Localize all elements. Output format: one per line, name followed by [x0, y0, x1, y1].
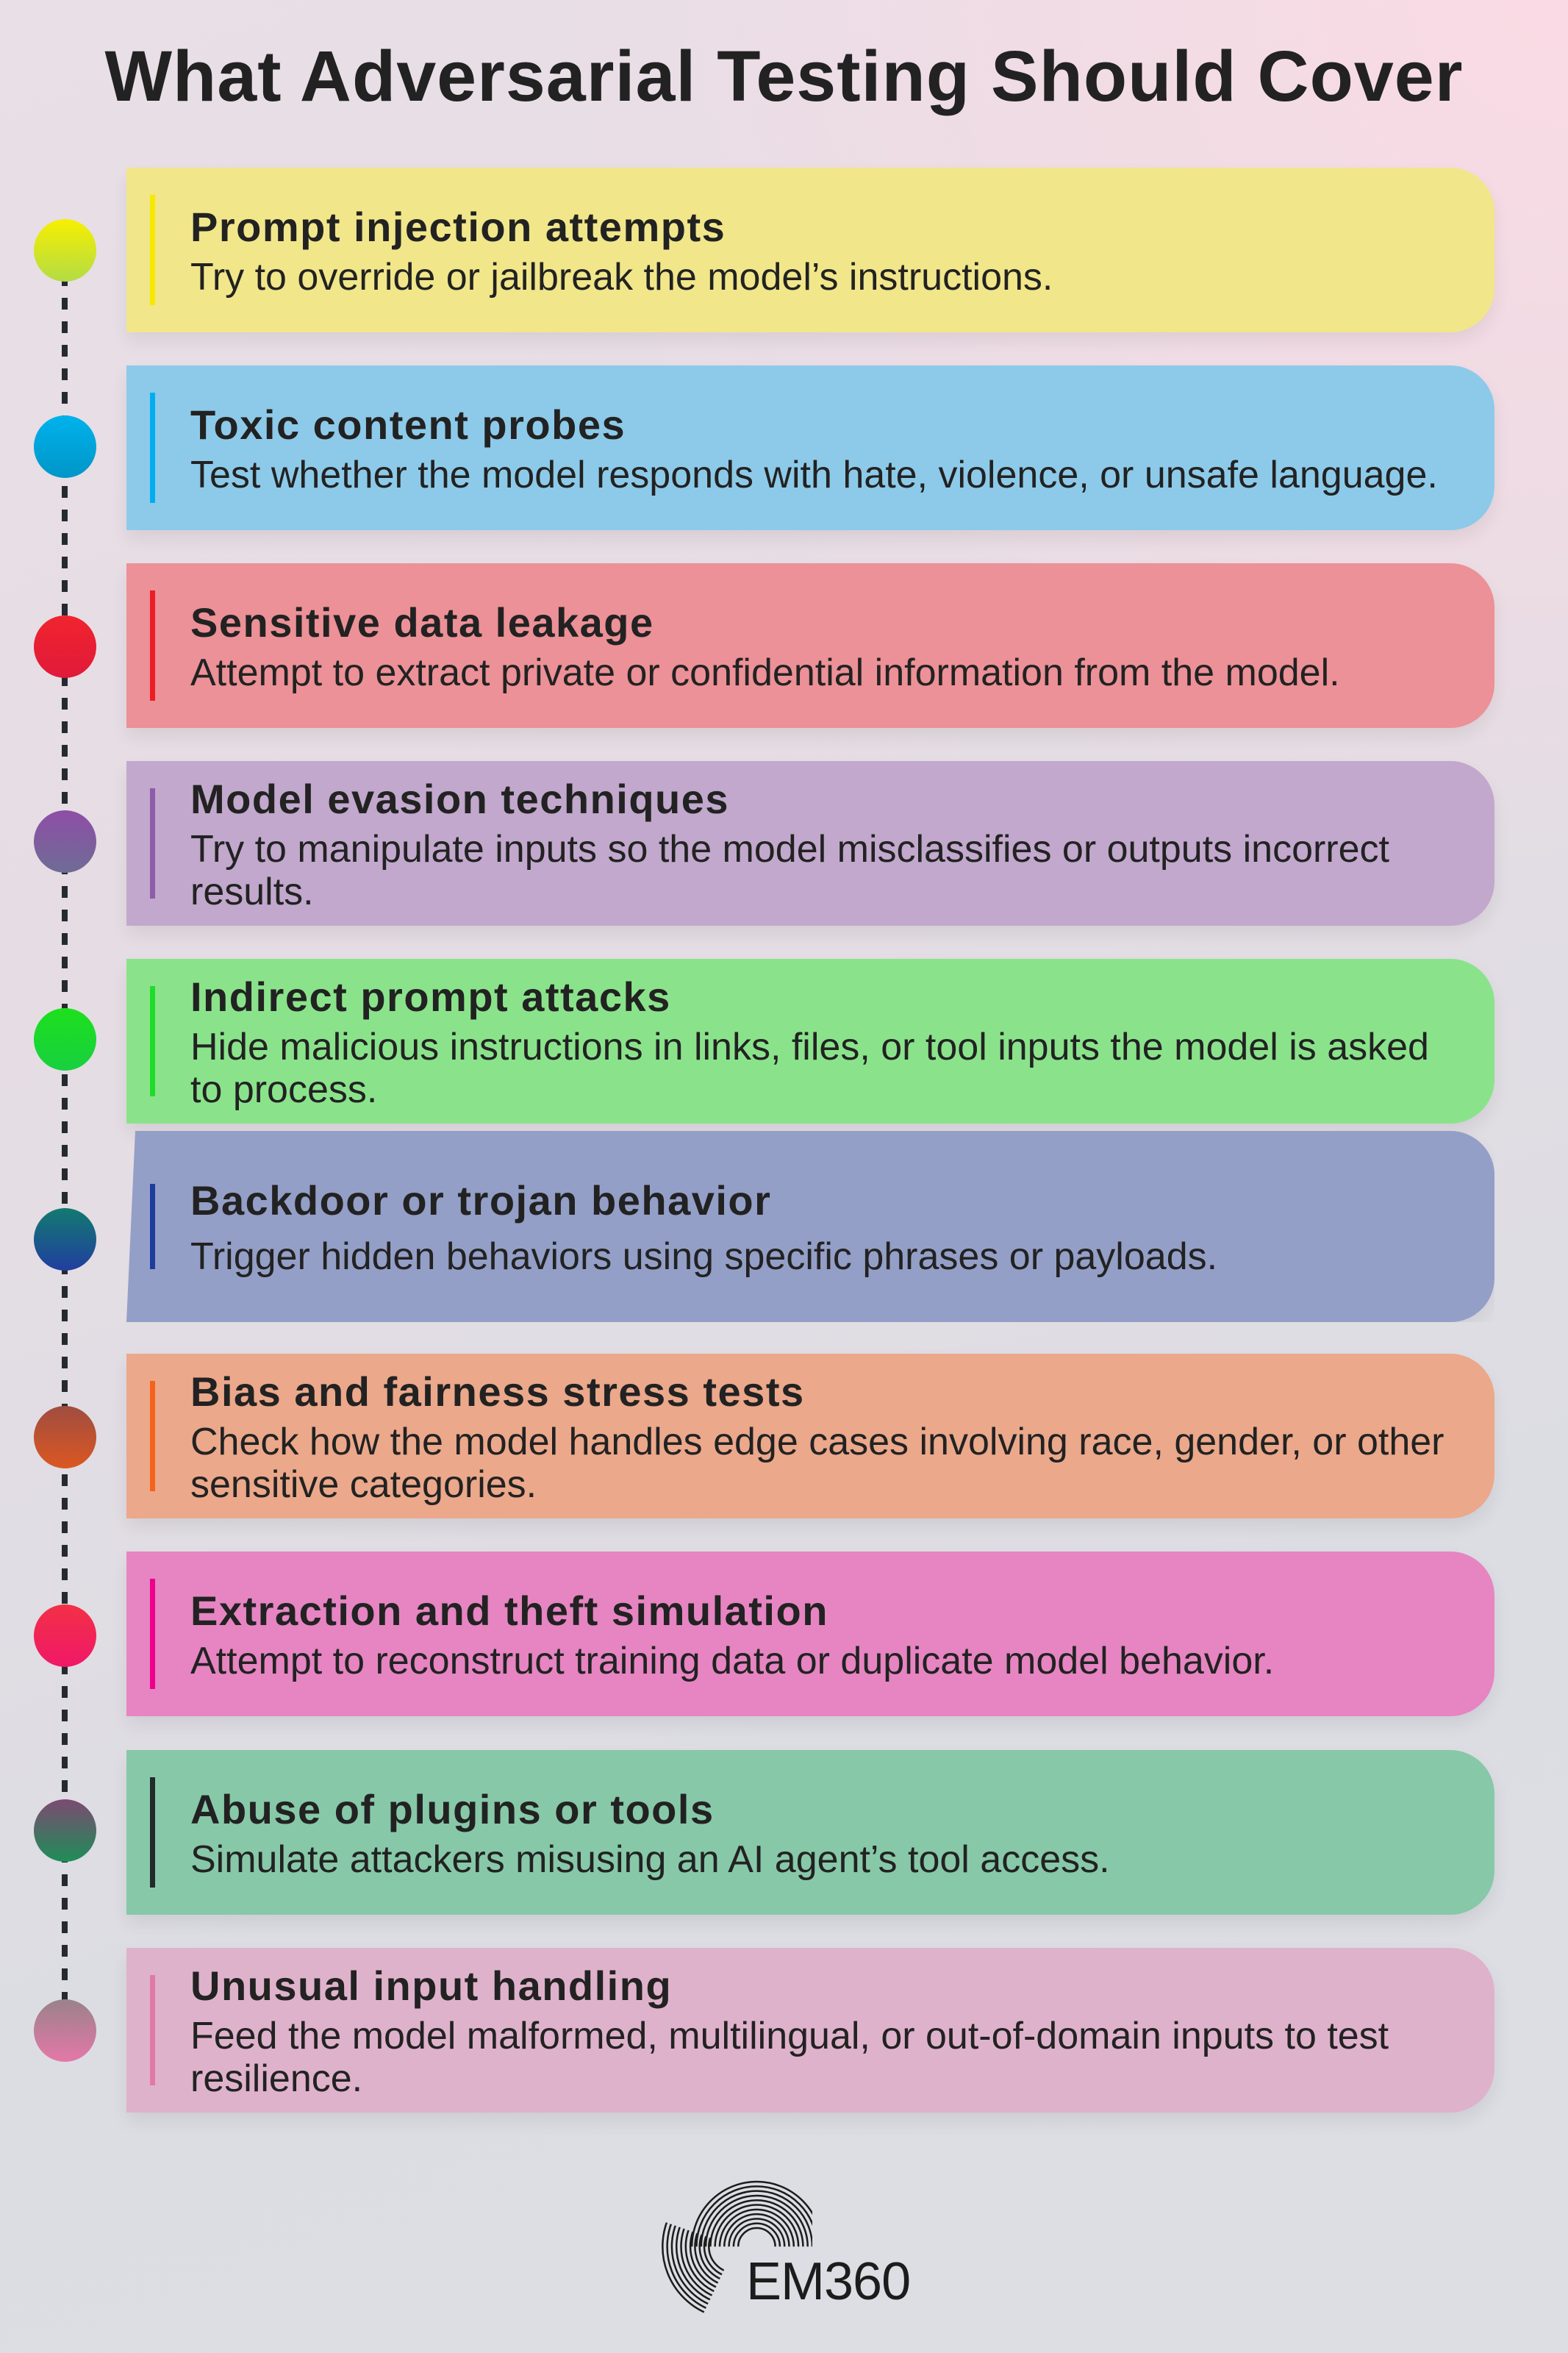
- heading: Toxic content probes: [190, 401, 626, 448]
- description: Try to manipulate inputs so the model misclassifies or outputs incorrect: [190, 828, 1389, 871]
- description: Trigger hidden behaviors using specific phrases or payloads.: [190, 1235, 1217, 1278]
- description: results.: [190, 871, 314, 913]
- description: [190, 828, 1389, 913]
- description: to process.: [190, 1068, 377, 1111]
- dot 5: [34, 1008, 96, 1071]
- panel: toxic content: [126, 365, 1494, 530]
- panel: extraction: [126, 1552, 1494, 1716]
- title: What Adversarial Testing Should Cover: [104, 36, 1463, 116]
- logo: EM360: [662, 2181, 910, 2313]
- description: Hide malicious instructions in links, files, or tool inputs the model is asked: [190, 1026, 1429, 1068]
- description: sensitive categories.: [190, 1463, 537, 1506]
- heading: Prompt injection attempts: [190, 204, 726, 250]
- panel: plugins: [126, 1750, 1494, 1915]
- heading: Backdoor or trojan behavior: [190, 1177, 771, 1224]
- dot 8: [34, 1604, 96, 1667]
- panel: prompt injection: [126, 168, 1494, 332]
- heading: Abuse of plugins or tools: [190, 1786, 715, 1832]
- dot 1: [34, 219, 96, 282]
- description: Simulate attackers misusing an AI agent’s tool access.: [190, 1838, 1110, 1881]
- dot 6: [34, 1208, 96, 1271]
- heading: Sensitive data leakage: [190, 599, 654, 646]
- dot 3: [34, 615, 96, 678]
- dot 10: [34, 1999, 96, 2062]
- heading: Extraction and theft simulation: [190, 1588, 828, 1634]
- heading: Indirect prompt attacks: [190, 974, 671, 1020]
- description: Attempt to extract private or confidential information from the model.: [190, 651, 1340, 694]
- panel: model evasion: [126, 761, 1494, 926]
- panel: backdoor: [126, 1131, 1494, 1322]
- dot 2: [34, 415, 96, 478]
- description: resilience.: [190, 2057, 362, 2100]
- logo: EM360: EM360: [746, 2252, 910, 2311]
- description: Test whether the model responds with hate, violence, or unsafe language.: [190, 454, 1438, 496]
- description: Try to override or jailbreak the model’s instructions.: [190, 256, 1053, 299]
- panel: indirect prompt: [126, 959, 1494, 1124]
- heading: Model evasion techniques: [190, 776, 729, 822]
- dot 9: [34, 1799, 96, 1862]
- description: [190, 1421, 1444, 1506]
- description: [190, 2015, 1389, 2100]
- timeline dashed line: [62, 251, 68, 2031]
- panel: unusual input: [126, 1948, 1494, 2113]
- heading: Unusual input handling: [190, 1963, 672, 2009]
- description: Feed the model malformed, multilingual, or out-of-domain inputs to test: [190, 2015, 1389, 2057]
- dot 7: [34, 1406, 96, 1468]
- description: Attempt to reconstruct training data or duplicate model behavior.: [190, 1640, 1274, 1682]
- dot 4: [34, 810, 96, 873]
- heading: Bias and fairness stress tests: [190, 1368, 805, 1415]
- description: Check how the model handles edge cases involving race, gender, or other: [190, 1421, 1444, 1463]
- panel: sensitive data: [126, 563, 1494, 728]
- description: [190, 1026, 1429, 1111]
- panel: bias: [126, 1354, 1494, 1518]
